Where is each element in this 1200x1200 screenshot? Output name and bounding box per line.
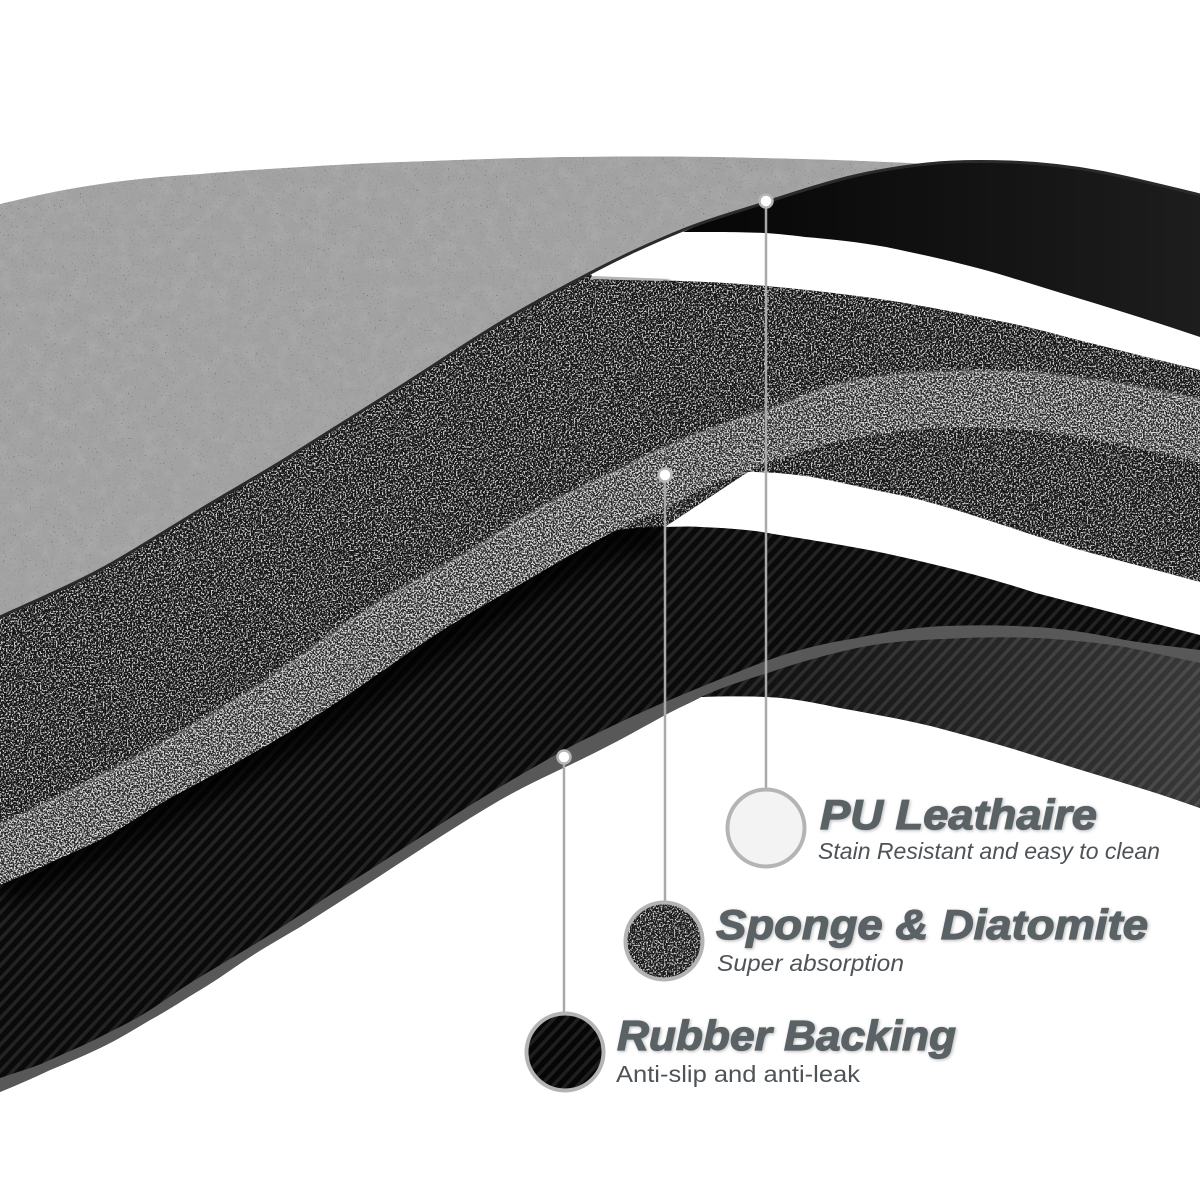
- rubber backing grey edge strip: [0, 625, 1200, 1092]
- band highlight ridge: [0, 371, 1200, 825]
- swatch: PU: [728, 790, 804, 866]
- anchor dot: sponge: [658, 468, 672, 482]
- description: sponge: Super absorption: [717, 950, 904, 976]
- layer: diatomite band: [0, 371, 1200, 885]
- layer stack illustration: [0, 156, 1200, 1092]
- swatch: sponge: [624, 901, 704, 981]
- lighter face carbon-fibre stripes: [701, 637, 1200, 808]
- callout: Rubber Backing: [525, 750, 956, 1092]
- layer: sponge full shape: [0, 265, 1200, 900]
- description: PU: Stain Resistant and easy to clean: [818, 838, 1160, 864]
- layer: black underside of PU: [683, 161, 1200, 337]
- rubber backing lighter face: [701, 637, 1200, 808]
- rubber backing carbon-fibre stripes: [0, 527, 1200, 1092]
- light strip at sponge top edge: [590, 276, 672, 281]
- anchor dot: PU: [760, 194, 772, 208]
- leader line: rubber: [563, 758, 565, 1014]
- leader line: sponge: [664, 476, 666, 903]
- swatch: rubber: [525, 1012, 605, 1092]
- edge highlight of PU layer: [0, 161, 1200, 617]
- leader line: PU: [765, 202, 767, 790]
- heading: Sponge & Diatomite: Sponge & Diatomite: [716, 901, 1148, 948]
- description: rubber: Anti-slip and anti-leak: [616, 1061, 861, 1087]
- callout: PU Leathaire: [728, 194, 1160, 866]
- heading: Rubber Backing: Rubber Backing: [617, 1012, 956, 1059]
- rubber shadow under sponge: [0, 527, 661, 885]
- callout: Sponge & Diatomite: [624, 468, 1148, 981]
- layer: PU leathaire top surface: [0, 156, 927, 617]
- heading: PU Leathaire: PU Leathaire: [820, 791, 1097, 838]
- layer: rubber backing top: [0, 527, 1200, 1092]
- anchor dot: rubber: [558, 750, 570, 764]
